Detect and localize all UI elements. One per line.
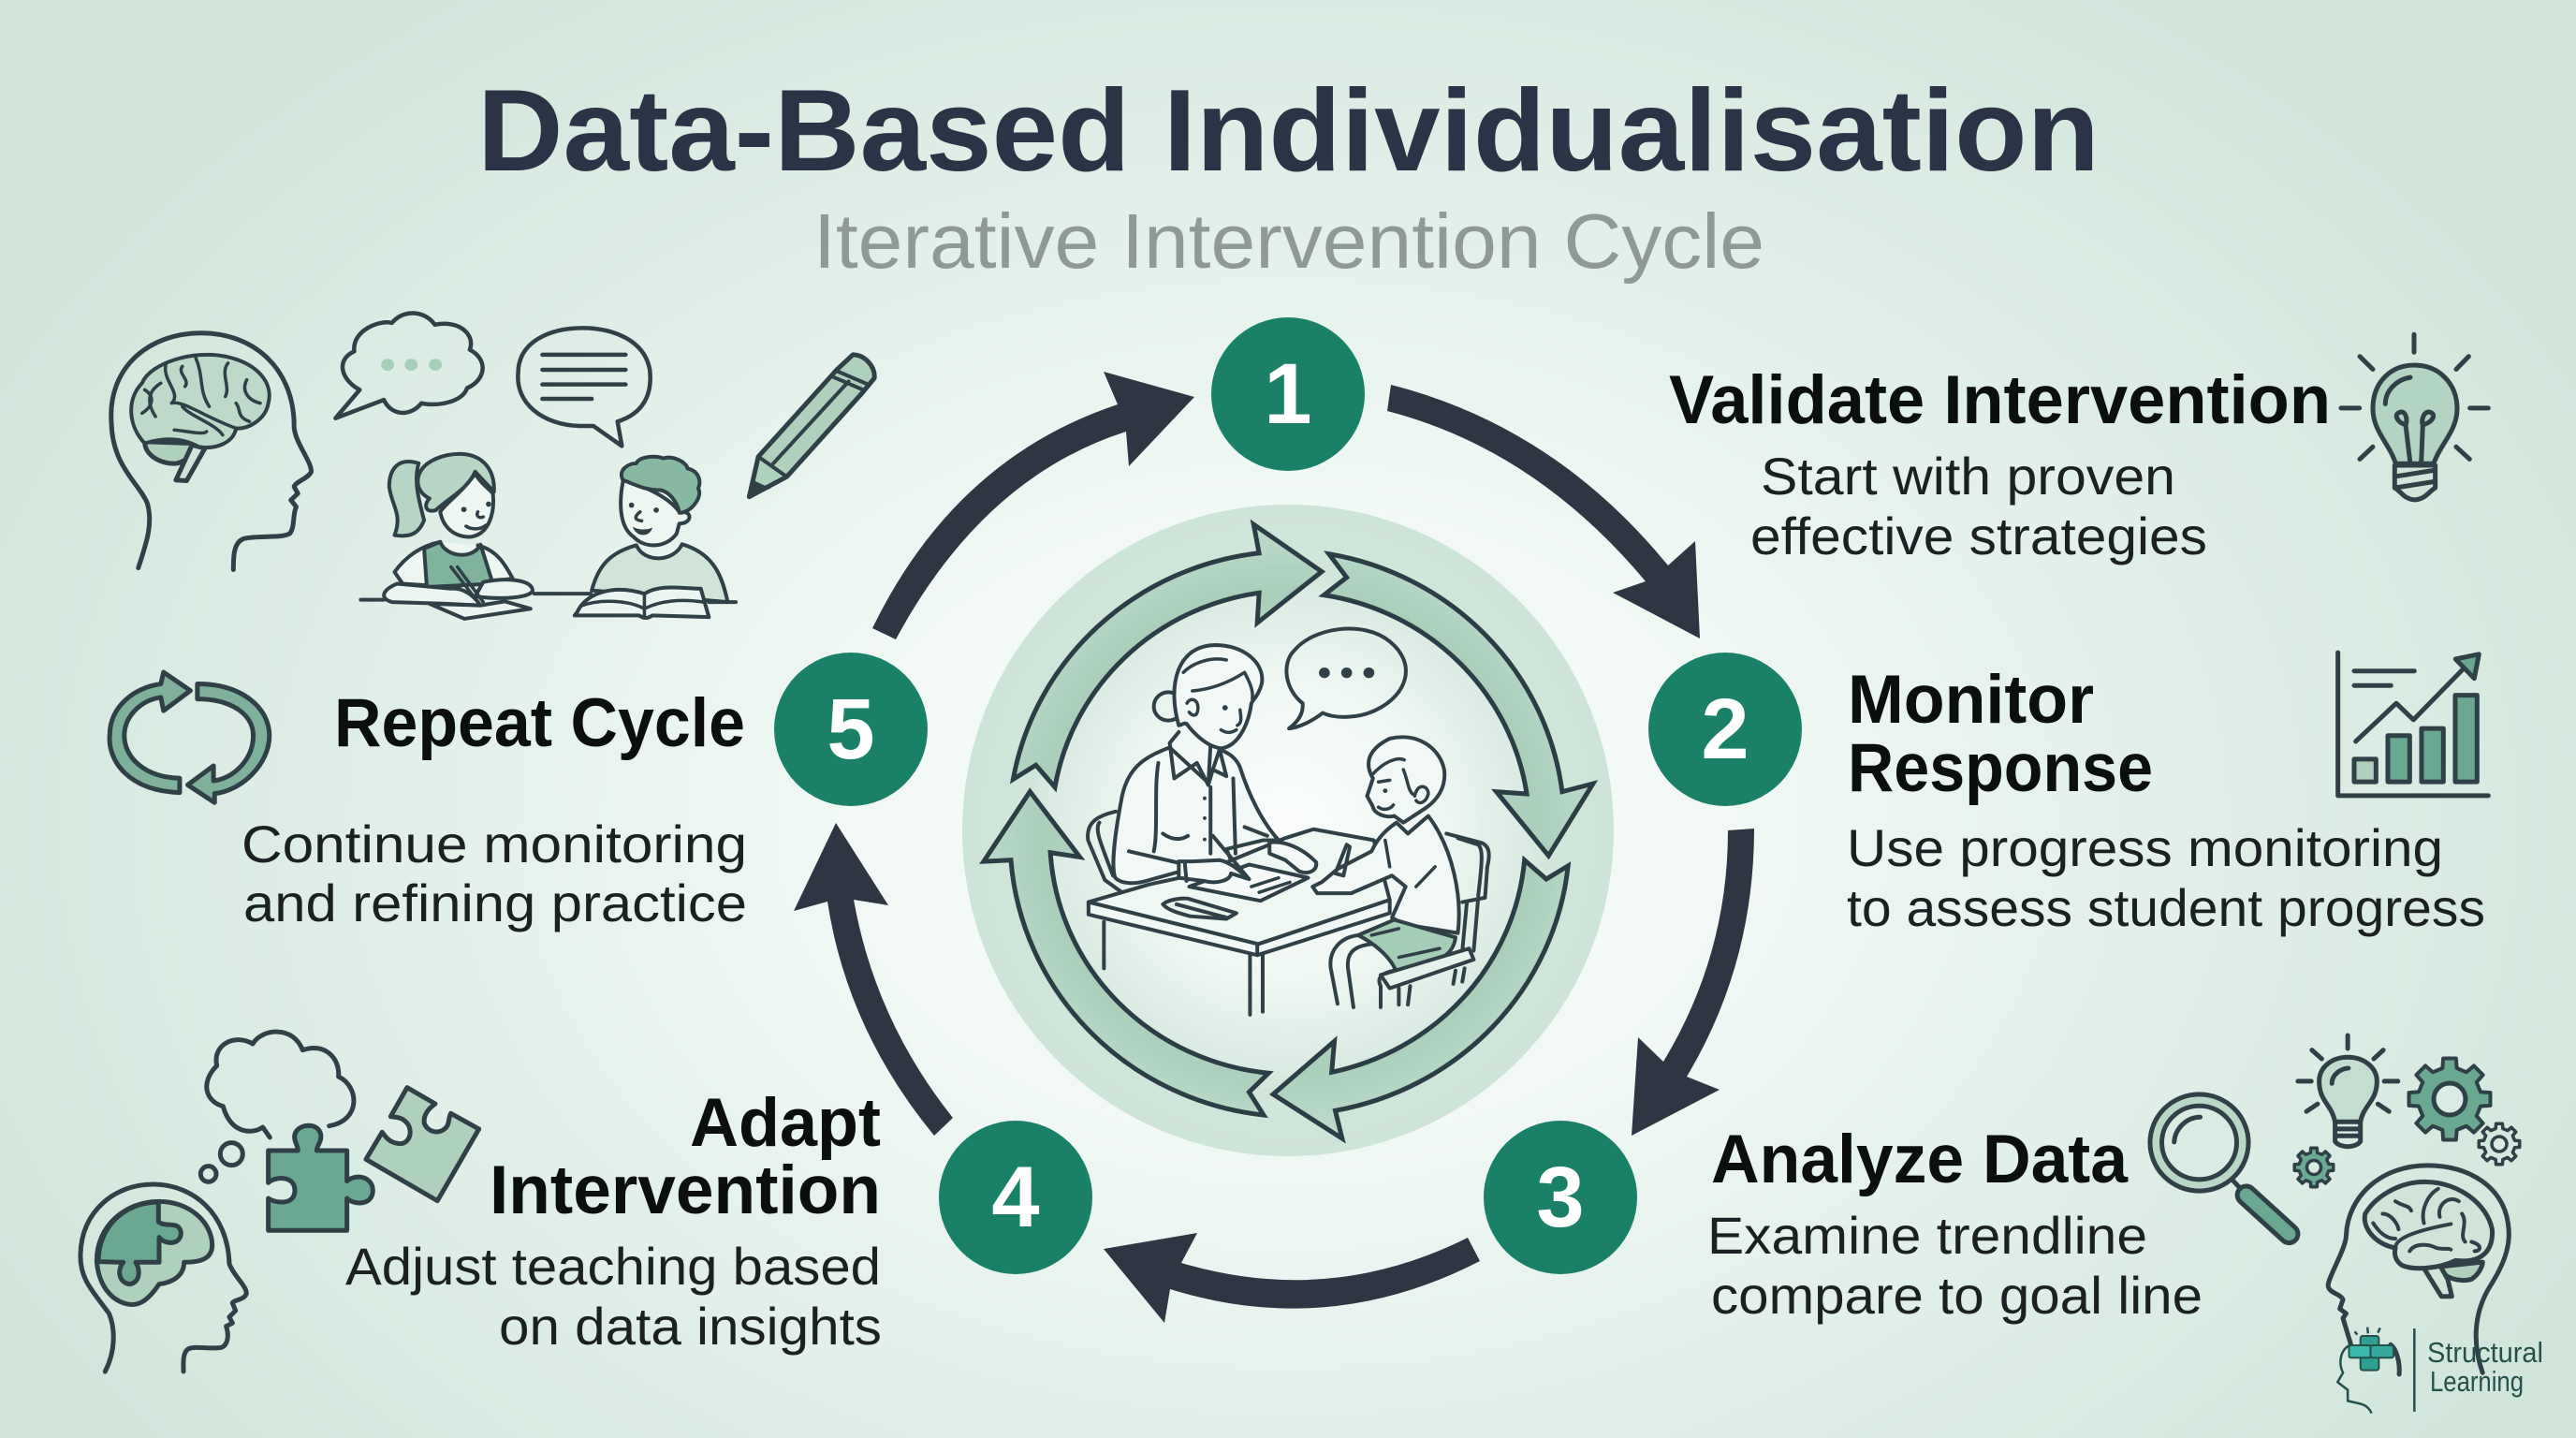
top-left illustration group <box>110 313 874 802</box>
step 4 text: Adapt Intervention: on data insights <box>499 1297 882 1356</box>
step 3 text: Analyze Data: Analyze Data <box>1711 1122 2129 1197</box>
gear small right <box>2479 1123 2520 1165</box>
step 1 text: Validate Intervention: Validate Intervention <box>1669 362 2331 438</box>
step 2 text: Monitor Response: to assess student progress <box>1847 878 2485 937</box>
step 1 text: Validate Intervention: Start with proven <box>1761 447 2175 506</box>
step badge 5: 5 <box>827 682 875 777</box>
step badge 1: 1 <box>1264 346 1312 442</box>
step 5 text: Repeat Cycle: and refining practice <box>243 873 747 932</box>
cycle arrow: step 2 to step 3 <box>1632 829 1754 1136</box>
icon: adapt thinking head with puzzle pieces <box>80 1032 479 1372</box>
cycle arrow: step 1 to step 2 <box>1387 385 1700 638</box>
gear large <box>2409 1059 2490 1139</box>
logo: Structural Learning <box>2337 1328 2543 1414</box>
step badge 4 <box>939 1121 1092 1274</box>
step 2 text: Monitor Response: Monitor <box>1848 662 2094 738</box>
puzzle pieces <box>269 1088 479 1230</box>
girl <box>384 454 533 619</box>
step 4 text: Adapt Intervention: Adapt <box>690 1085 881 1161</box>
speech bubble <box>1286 628 1406 728</box>
step badge 2: 2 <box>1701 682 1749 777</box>
small light bulb <box>2298 1035 2398 1147</box>
thought cloud <box>200 1032 354 1181</box>
desk <box>1089 829 1390 944</box>
subtitle: Iterative Intervention Cycle <box>813 198 1764 285</box>
step 3 text: Analyze Data: compare to goal line <box>1711 1266 2203 1325</box>
head with brain <box>2328 1166 2509 1372</box>
table line <box>360 594 736 602</box>
magnifying glass <box>2150 1094 2289 1234</box>
head with puzzle brain <box>80 1184 246 1372</box>
gear small right hole <box>2492 1137 2507 1152</box>
step 5 text: Repeat Cycle: Repeat Cycle <box>334 685 745 761</box>
title: Data-Based Individualisation <box>477 66 2100 196</box>
cycle arrow: step 4 to step 5 <box>794 823 953 1136</box>
step 3 text: Analyze Data: Examine trendline <box>1707 1206 2147 1265</box>
teacher and student at desk <box>1088 628 1489 1015</box>
gear large hole <box>2434 1083 2466 1115</box>
icon: repeat cycle arrows <box>110 672 270 802</box>
logo: Structural Learning: Learning <box>2430 1365 2524 1398</box>
teacher <box>1089 645 1473 1015</box>
icon: head with brain <box>111 333 312 569</box>
step 4 text: Adapt Intervention <box>345 1085 882 1356</box>
step badge 4: 4 <box>991 1150 1040 1245</box>
cycle arrow: step 5 to step 1 <box>872 372 1194 639</box>
icon: cloud speech bubble <box>335 313 483 418</box>
step badge 3 <box>1484 1121 1637 1274</box>
paper and pencil <box>1189 864 1308 901</box>
teacher hands <box>1178 836 1249 882</box>
step badge 2 <box>1648 653 1802 806</box>
step badge 3: 3 <box>1536 1150 1585 1245</box>
gear small left hole <box>2306 1161 2321 1174</box>
step 2 text: Monitor Response: Response <box>1848 730 2153 806</box>
step 2 text: Monitor Response <box>1847 662 2485 937</box>
gear small left <box>2294 1148 2334 1187</box>
chairs <box>1088 812 1122 892</box>
logo: Structural Learning: Structural <box>2427 1336 2543 1369</box>
step 1 text: Validate Intervention: effective strategies <box>1750 506 2207 565</box>
step 1 text: Validate Intervention <box>1669 362 2331 565</box>
icon: text speech bubble <box>518 328 651 446</box>
boy <box>575 457 727 618</box>
step badge 1 <box>1211 317 1365 471</box>
student <box>1367 737 1444 823</box>
step 5 text: Repeat Cycle <box>242 685 747 932</box>
inner cycle arrows <box>984 524 1593 1138</box>
icon: light bulb (validate) <box>2341 334 2488 500</box>
step 3 text: Analyze Data <box>1707 1122 2203 1325</box>
step 4 text: Adapt Intervention: Adjust teaching based <box>345 1237 881 1296</box>
icons: analyze data group <box>2150 1035 2520 1372</box>
icon: bar chart with rising arrow <box>2338 653 2488 796</box>
central disc illustration <box>80 313 2543 1414</box>
step badge 5 <box>774 653 928 806</box>
cycle arrow: step 3 to step 4 <box>1104 1233 1480 1323</box>
icon: pencil <box>749 355 874 497</box>
step 2 text: Monitor Response: Use progress monitoring <box>1847 818 2443 877</box>
illustration: two children studying <box>360 454 736 619</box>
step 4 text: Adapt Intervention: Intervention <box>490 1152 881 1228</box>
step 5 text: Repeat Cycle: Continue monitoring <box>242 814 747 873</box>
